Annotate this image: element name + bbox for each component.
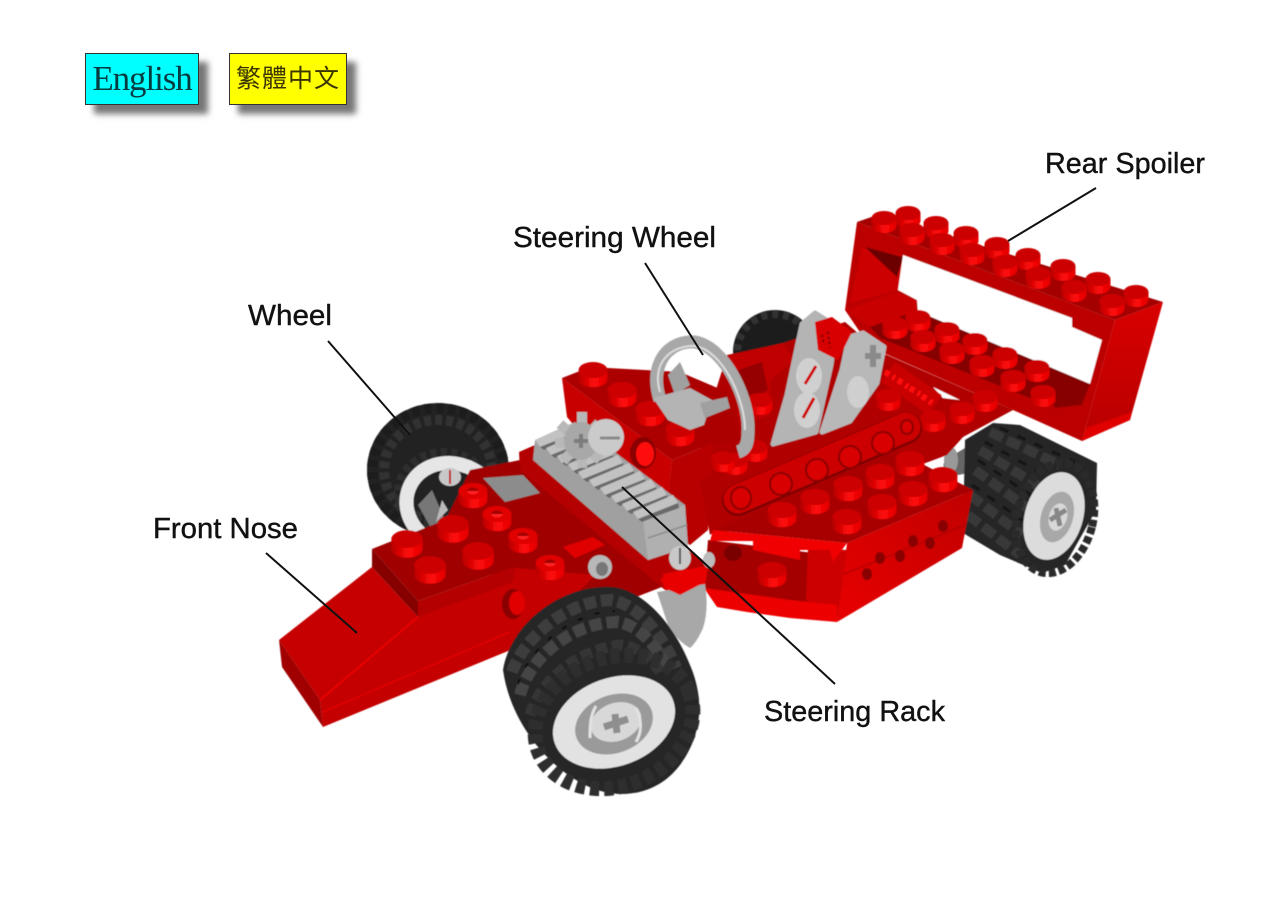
rack body [533,422,688,560]
button: Traditional Chinese [229,53,347,105]
leader line: rear spoiler [1008,188,1096,241]
label: Rear Spoiler: Rear Spoiler [1045,148,1205,180]
spoiler top face [857,214,1163,320]
rack teeth [535,423,679,522]
pod end face [837,490,973,622]
label: Front Nose: Front Nose [153,513,298,545]
button: Traditional Chinese: 繁體中文 [236,65,340,93]
label: Steering Wheel: Steering Wheel [513,222,716,254]
steering knuckle [657,546,715,648]
steering wheel [653,342,748,452]
spoiler window [898,255,1102,384]
button: English: English [92,59,192,98]
nose section [279,460,667,727]
rear right wheel [944,423,1105,582]
pod holes [862,520,948,580]
rear left wheel [733,310,817,394]
button: English [85,53,199,105]
upper bar studs [872,206,1148,316]
technic link beam [731,420,913,509]
grey lift arms [773,313,884,444]
front left wheel [367,403,509,537]
nose slope [279,567,418,700]
label: Steering Rack: Steering Rack [764,696,945,728]
lower bar studs [882,310,1056,407]
nose tip [279,640,323,727]
label: Wheel: Wheel [248,300,332,332]
leader line: steering rack [622,487,835,684]
leader line: wheel [328,341,410,435]
spoiler end face [1082,302,1163,441]
right lift arm [822,333,884,432]
nose plate [372,549,418,617]
leader line: front nose [266,553,357,633]
side pod [704,450,973,622]
front right wheel [503,587,713,812]
nose side [320,568,595,727]
hollow studs [459,483,564,580]
rear body [700,322,1013,535]
rack base plate [519,445,710,590]
pod top [713,450,973,543]
leader line: steering wheel [645,263,703,355]
pod underside [704,540,837,622]
red pin [815,317,852,360]
axle pin [439,468,461,486]
car illustration [279,206,1163,812]
pinion gear [555,412,624,468]
track rod [483,475,540,502]
spoiler front face [845,222,1115,441]
front right rim [540,659,688,785]
rear spoiler [845,206,1163,441]
left lift arm [773,313,836,444]
pod studs [768,451,957,534]
steering rack [519,412,715,648]
plate studs [391,515,494,584]
center block [562,362,740,545]
